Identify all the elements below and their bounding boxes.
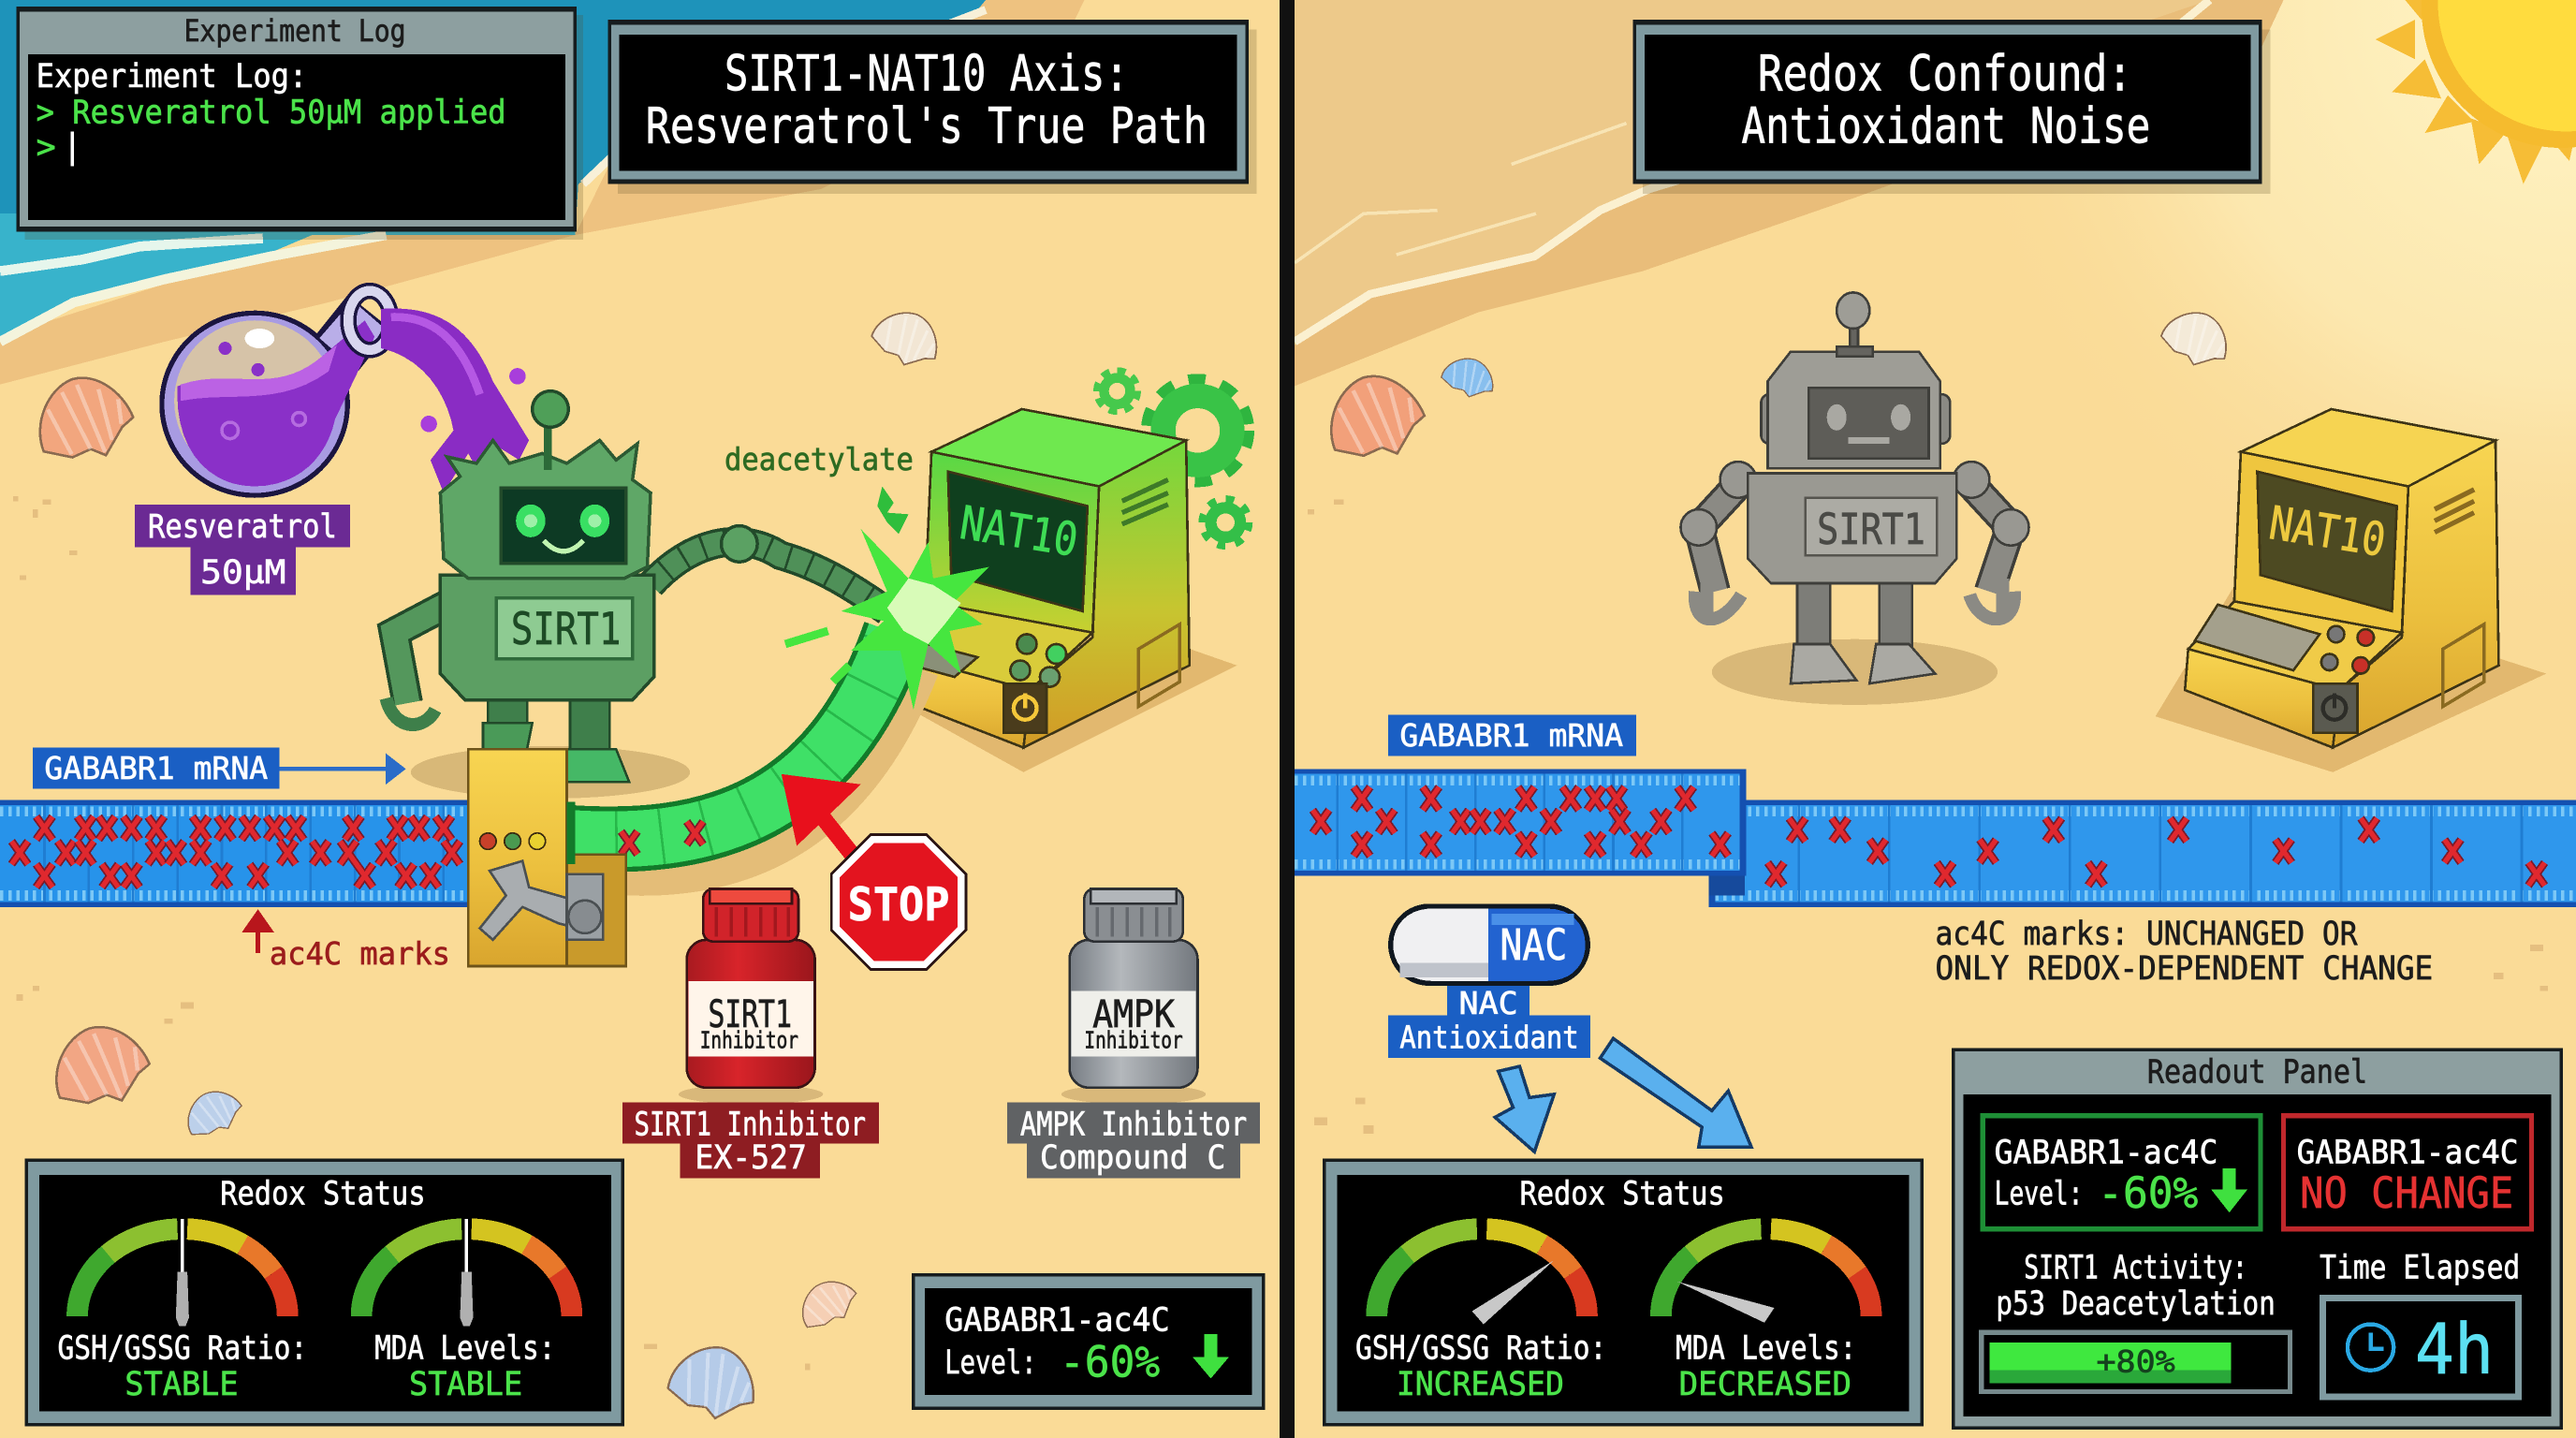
readout: level -60% [1983,1116,2261,1229]
arrow: NAC to gauge two [1600,1038,1751,1147]
MDA label: MDA Levels: [1676,1328,1856,1367]
gauge: GSH/GSSG stable [78,1219,287,1326]
note: ac4C unchanged: ONLY REDOX-DEPENDENT CHANGE [1935,949,2433,988]
heading: Redox Status [1519,1174,1725,1212]
purple stream pouring [381,308,529,493]
bottle: SIRT1 inhibitor [679,888,823,1104]
label: NAC Antioxidant: Antioxidant [1399,1020,1579,1056]
GSH label: GSH/GSSG Ratio: [1355,1328,1606,1367]
NAT10 machine active [875,409,1237,772]
shell: blue large [664,1337,765,1427]
experiment log panel [17,7,583,240]
log heading: Experiment Log: [37,57,307,95]
title: SIRT1-NAT10 [607,20,1257,194]
gauge: MDA decreased [1661,1229,1871,1323]
label: SIRT1 Inhibitor EX-527 [622,1103,879,1178]
NAT10 label green: NAT10 [957,495,1082,567]
left beach shoreline [0,0,1084,385]
icon: power symbol green machine [1014,694,1036,720]
note: ac4C unchanged [1935,915,2433,988]
bottle: AMPK inhibitor: Inhibitor [1084,1027,1183,1054]
shell: small blue [179,1082,248,1143]
label: Resveratrol 50µM: Resveratrol [148,507,337,546]
readout: ac4C level: Level: [944,1343,1036,1382]
heading: Redox Status [220,1174,426,1212]
panel: readout [1952,1049,2563,1430]
bottle: AMPK inhibitor: AMPK [1092,992,1176,1036]
panel title: Readout Panel [2147,1053,2367,1092]
p53 label: p53 Deacetylation [1996,1284,2276,1323]
GSH label: GSH/GSSG Ratio: [57,1328,307,1367]
shell: white left top [866,301,948,375]
log cursor [71,131,74,166]
left panel sand background [0,0,1281,1438]
panel: redox status right [1323,1158,1924,1426]
shell: white right [2156,301,2238,375]
label: NAC Antioxidant: NAC [1459,985,1518,1021]
label: AMPK Inhibitor Compound C [1007,1103,1260,1178]
label: ac4C marks arrow [246,914,270,953]
starburst [785,529,989,710]
title: Redox Confound: Redox Confound: [1758,46,2132,103]
progress bar +80%: +80% [2096,1345,2175,1379]
green deacetylated mRNA [570,633,896,855]
panel title: Experiment Log [184,15,406,49]
green robot SIRT1: SIRT1 [511,604,621,655]
ac4C marks sparse [1767,818,2545,886]
gray robot SIRT1: SIRT1 [1817,505,1925,554]
SIRT1 activity label: SIRT1 Activity: [2024,1248,2247,1286]
shell: orange left top [27,366,140,471]
ac4C marks dense [11,816,460,888]
arrow to cutter [279,757,402,781]
title: SIRT1-NAT10: Resveratrol's True Path [646,98,1208,155]
MDA status: DECREASED [1679,1365,1852,1403]
readout: level -60%: -60% [2098,1168,2198,1218]
mRNA strip: right back [1708,800,2576,907]
NAT10 machine inactive [2156,409,2546,772]
note: ac4C unchanged: ac4C marks: UNCHANGED OR [1935,915,2358,953]
title: SIRT1-NAT10: SIRT1-NAT10 Axis: [724,46,1129,103]
green robot SIRT1 [386,391,887,782]
shell: blue right [1438,351,1500,404]
panel: redox status left [24,1158,624,1426]
label: SIRT1 Inhibitor EX-527: EX-527 [695,1138,807,1177]
shell: orange right [1319,365,1432,469]
deacetylate label: deacetylate [724,441,914,477]
time box 4h: 4h [2415,1311,2494,1390]
right panel sand background [1295,0,2576,1438]
title: Redox Confound: Antioxidant Noise [1741,98,2150,155]
readout: level -60%: GABABR1-ac4C [1995,1134,2217,1172]
bottle: SIRT1 inhibitor: SIRT1 [708,992,792,1036]
ac4C marks dense [1312,787,1728,856]
mRNA strip: left [0,800,476,907]
readout: no change: GABABR1-ac4C [2297,1134,2519,1172]
time box 4h [2323,1298,2519,1397]
divider [1280,0,1295,1438]
cutter machine [468,749,626,966]
right beach shoreline and sun glow [1295,0,2576,822]
readout: ac4C level: GABABR1-ac4C [944,1301,1170,1340]
shell: orange left lower [44,1016,156,1116]
label: AMPK Inhibitor Compound C: AMPK Inhibitor [1020,1106,1247,1144]
stop sign: STOP [848,877,949,932]
GSH status: INCREASED [1397,1365,1564,1403]
MDA status: STABLE [409,1365,522,1403]
stop sign [831,835,966,969]
time elapsed label: Time Elapsed [2320,1248,2520,1286]
SIRT1 plate [496,598,633,659]
NAT10 label inactive: NAT10 [2265,495,2390,567]
deacetylate arrow [877,486,909,534]
label: NAC Antioxidant [1388,985,1590,1058]
label: Resveratrol 50µM [135,505,350,594]
mRNA strip: right front [1295,769,1747,895]
NAC capsule [1388,903,1590,986]
arrow: NAC to gauge one [1495,1066,1554,1152]
title: Redox Confound [1633,20,2271,194]
label: Resveratrol 50µM: 50µM [200,553,285,592]
shell: peach [792,1270,864,1336]
readout: ac4C level [912,1273,1265,1410]
label: GABABR1 mRNA left: GABABR1 mRNA [44,750,268,786]
gears: green [1097,372,1249,546]
readout: no change [2284,1116,2532,1229]
gray robot SIRT1 [1680,292,2029,705]
sand specks [13,496,2548,1371]
gauge: MDA stable [361,1219,572,1326]
label: GABABR1 mRNA right: GABABR1 mRNA [1399,717,1623,754]
readout: no change: NO CHANGE [2300,1168,2513,1218]
MDA label: MDA Levels: [374,1328,555,1367]
log line: > Resveratrol 50µM applied [37,94,506,132]
flask: resveratrol [159,291,391,498]
NAC capsule: NAC [1500,920,1567,970]
bottle: SIRT1 inhibitor: Inhibitor [700,1027,798,1054]
sun [2376,0,2576,184]
SIRT1 plate [1806,498,1937,555]
icon: down arrow [1193,1334,1229,1378]
GSH status: STABLE [124,1365,239,1403]
label: ac4C marks: ac4C marks [270,935,450,972]
gauge: GSH/GSSG increased [1377,1229,1587,1325]
label: AMPK Inhibitor Compound C: Compound C [1040,1138,1225,1177]
label: SIRT1 Inhibitor EX-527: SIRT1 Inhibitor [634,1106,866,1144]
readout: level -60%: Level: [1995,1174,2083,1212]
log prompt: > [37,127,56,166]
progress bar +80% [1982,1332,2291,1392]
red arrow inhibition [792,784,862,868]
icon: power symbol gray [2323,694,2346,720]
mRNA shadow and cutter shadow [411,666,912,868]
readout: ac4C level: -60% [1060,1338,1160,1387]
bottle: AMPK inhibitor [1061,888,1206,1104]
